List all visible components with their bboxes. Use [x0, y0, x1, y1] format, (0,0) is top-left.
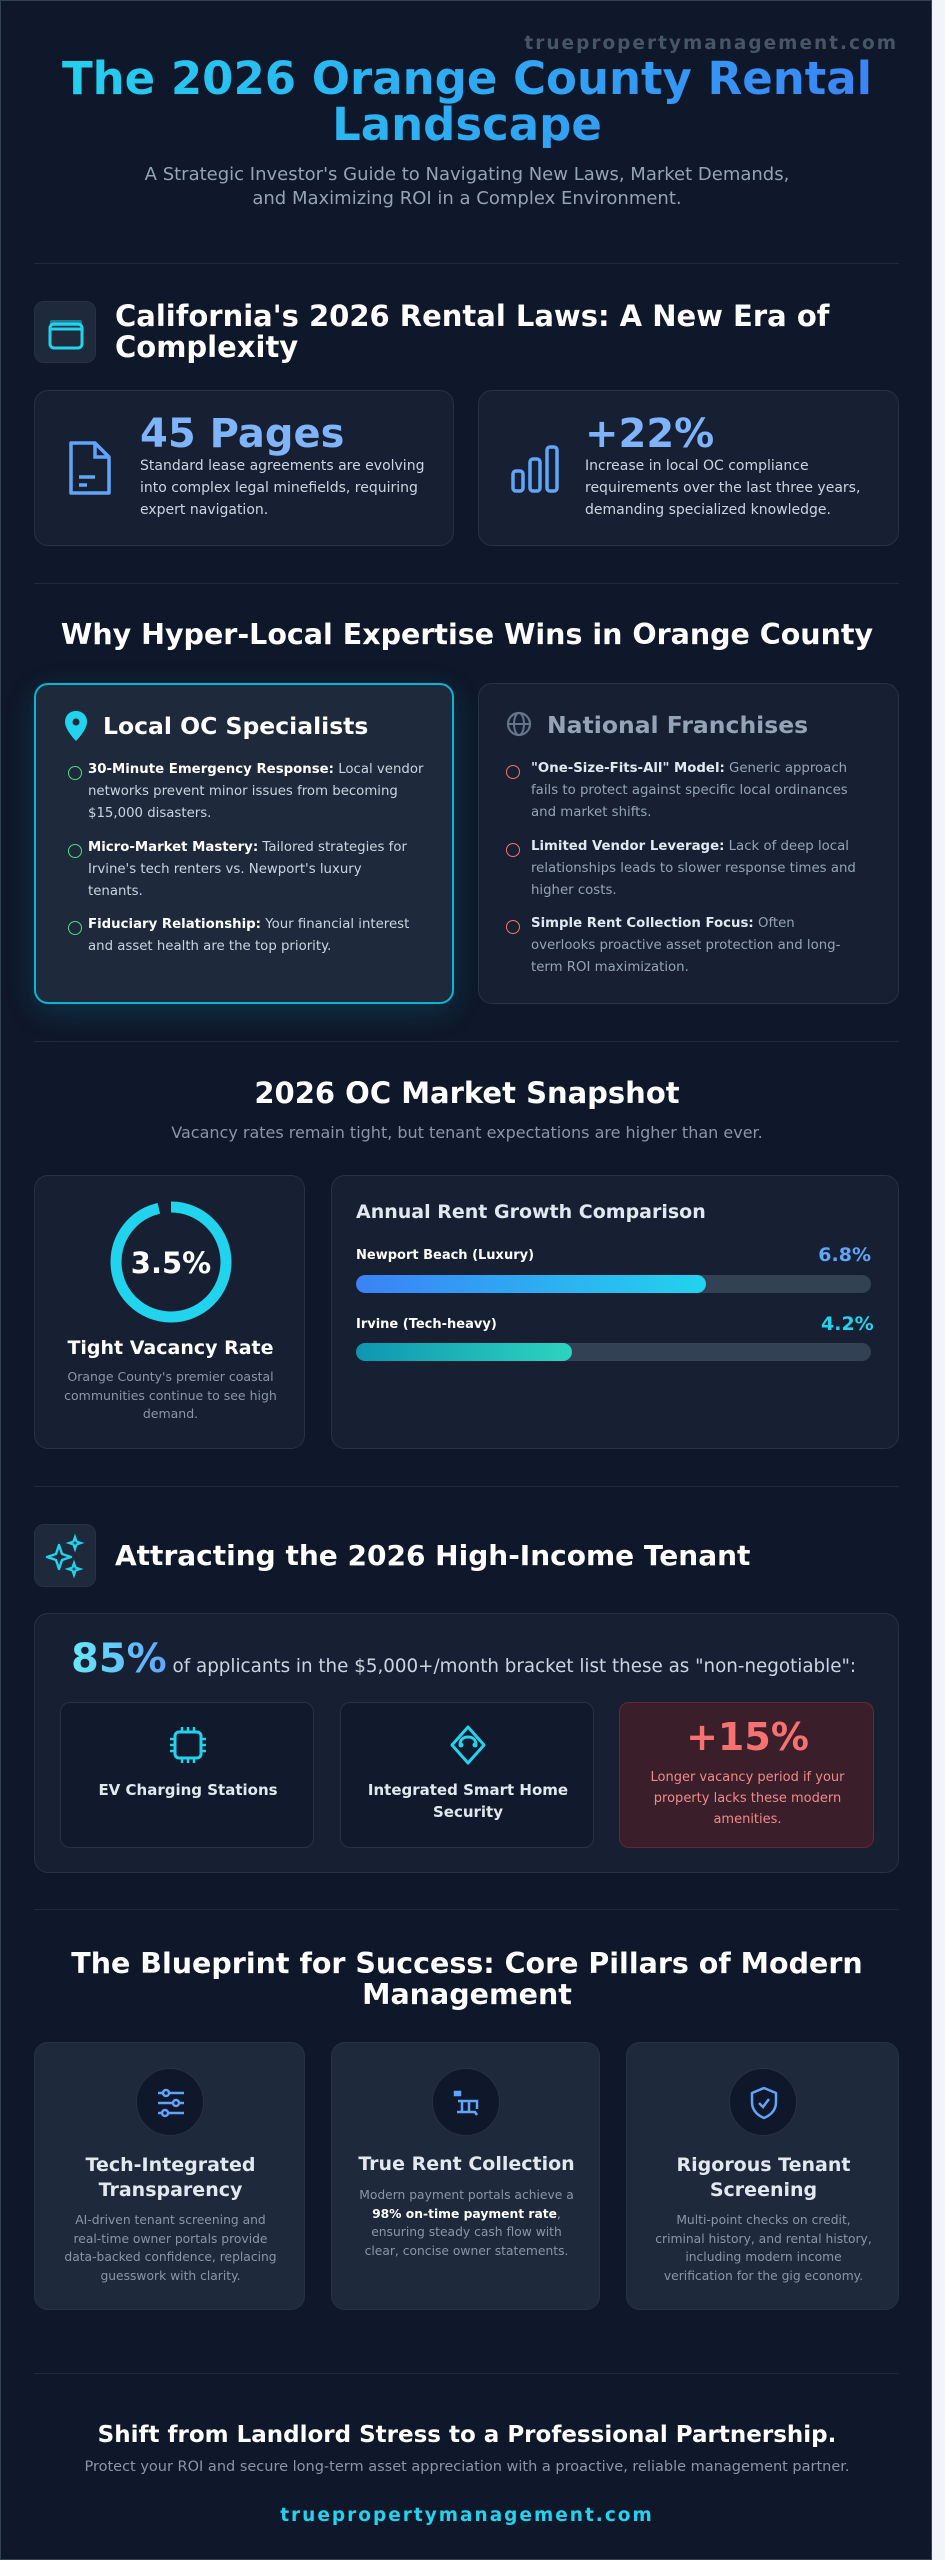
pillar: tech transparency: data-backed confidence, replacing [64, 2250, 277, 2264]
heading: Complexity [115, 330, 298, 364]
section 1 header [34, 299, 830, 364]
card title: National Franchises [547, 711, 808, 739]
icon: sparkles [34, 1524, 96, 1587]
pillar: tech transparency: AI-driven tenant screening and [75, 2213, 266, 2227]
pillar: tenant screening: verification for the gig economy. [664, 2269, 863, 2283]
pillar: tenant screening: including modern income [685, 2250, 842, 2264]
pillar: tech transparency [34, 2042, 305, 2310]
amenity: smart home [340, 1702, 594, 1848]
donut chart: 3.5% [131, 1246, 211, 1280]
panel: vacancy donut [34, 1175, 305, 1449]
donut chart [110, 1202, 232, 1322]
stat: 45 Pages [140, 411, 344, 457]
pillar: tenant screening: Screening [710, 2179, 817, 2201]
text: Vacancy rates remain tight, but tenant expectations are higher than ever. [171, 1123, 763, 1142]
section 4 header [34, 1524, 750, 1587]
pillar: rent collection: ensuring steady cash flow with [371, 2225, 562, 2239]
watermark: truepropertymanagement.com [524, 33, 898, 54]
stat line: 85% of applicants in the $5,000+/month bracket list these as "non-negotiable": [71, 1636, 856, 1682]
panel: national franchises: "One-Size-Fits-All" Model: Generic approach fails to protect against specific local ordinances and market shifts. [531, 761, 848, 820]
text: 4.2% [821, 1313, 874, 1335]
stat card: 45 pages [34, 390, 454, 546]
callout: +15% [619, 1702, 874, 1848]
subtitle [144, 164, 789, 209]
callout: +15%: +15% [686, 1715, 809, 1759]
panel: vacancy donut: Orange County's premier coastal communities continue to see high demand. [64, 1369, 277, 1421]
bar chart: 6.8% [818, 1244, 871, 1266]
footer url: truepropertymanagement.com [280, 2505, 654, 2526]
icon: bar chart [511, 445, 559, 493]
bar chart: Newport Beach (Luxury) [356, 1248, 534, 1263]
title: Landscape [332, 98, 602, 151]
stat card: 45 pages: Standard lease agreements are evolving into complex legal minefields, requiring expert navigation. [140, 458, 424, 518]
icon: document [69, 441, 111, 495]
icon: shield [729, 2068, 797, 2136]
heading: California's 2026 Rental Laws: A New Era of [115, 299, 829, 333]
callout: +15%: Longer vacancy period if your property lacks these modern amenities. [650, 1770, 845, 1827]
pillar: rent collection: True Rent Collection [358, 2153, 575, 2175]
subtitle: A Strategic Investor's Guide to Navigating New Laws, Market Demands, [145, 164, 789, 185]
subtitle: and Maximizing ROI in a Complex Environment. [252, 188, 682, 209]
pillar: tenant screening [626, 2042, 899, 2310]
panel: national franchises: Simple Rent Collection Focus: Often overlooks proactive asset protection and long-term ROI maximization. [531, 916, 840, 975]
pillar: rent collection [331, 2042, 600, 2310]
pillar: tenant screening: criminal history, and rental history, [655, 2232, 872, 2246]
closing text: Protect your ROI and secure long-term asset appreciation with a proactive, reliable management partner. [84, 2459, 850, 2475]
bar chart: Annual Rent Growth Comparison [356, 1201, 706, 1223]
title [31, 56, 903, 148]
pillar: tech transparency: Transparency [99, 2179, 242, 2201]
panel: national franchises: Limited Vendor Leverage: Lack of deep local relationships leads to slower response times and higher costs. [531, 839, 856, 898]
icon: pin [65, 711, 87, 741]
panel: local OC specialists [34, 683, 454, 1004]
heading: market snapshot: 2026 OC Market Snapshot [254, 1076, 680, 1110]
pillar: tech transparency: guesswork with clarity. [100, 2269, 241, 2283]
icon: payment [432, 2068, 500, 2136]
amenity: smart home: Integrated Smart Home Security [368, 1781, 568, 1821]
panel: national franchises [478, 683, 899, 1004]
bar chart [356, 1201, 871, 1266]
icon: globe [506, 712, 532, 736]
heading: blueprint [71, 1947, 863, 2011]
card title: Local OC Specialists [103, 712, 368, 740]
panel: local OC specialists: Micro-Market Mastery: Tailored strategies for Irvine's tech renters vs. Newport's luxury tenants. [88, 840, 407, 899]
text: Irvine (Tech-heavy) [356, 1317, 497, 1332]
pillar: tech transparency: real-time owner portals provide [74, 2232, 268, 2246]
pillar: tenant screening: Rigorous Tenant [677, 2154, 850, 2176]
stat: +22% [585, 411, 714, 457]
heading: blueprint: Management [362, 1978, 572, 2011]
icon: wallet [34, 301, 96, 363]
panel: vacancy donut: Tight Vacancy Rate [67, 1337, 274, 1359]
amenity: EV charging [60, 1702, 314, 1848]
panel: rent growth bars [331, 1175, 899, 1449]
amenity: EV charging: EV Charging Stations [98, 1781, 278, 1799]
stat card: +22% [478, 390, 899, 546]
panel: local OC specialists: Fiduciary Relationship: Your financial interest and asset health are the top priority. [88, 917, 409, 954]
panel: local OC specialists: 30-Minute Emergency Response: Local vendor networks prevent minor issues from becoming $15,000 disasters. [88, 762, 423, 821]
heading [115, 299, 830, 364]
icon: sliders [136, 2068, 204, 2136]
pillar: tech transparency: Tech-Integrated [86, 2154, 255, 2176]
pillar: rent collection: Modern payment portals achieve a [359, 2188, 574, 2202]
closing headline: Shift from Landlord Stress to a Professional Partnership. [98, 2422, 836, 2448]
pillar: tenant screening: Multi-point checks on credit, [676, 2213, 851, 2227]
pillar: rent collection: clear, concise owner statements. [365, 2244, 568, 2258]
heading: Attracting the 2026 High-Income Tenant [115, 1539, 750, 1572]
heading: hyper-local: Why Hyper-Local Expertise Wins in Orange County [61, 618, 873, 651]
stat card: +22%: Increase in local OC compliance requirements over the last three years, demanding specialized knowledge. [585, 458, 860, 518]
pillar: rent collection: 98% on-time payment rate, [372, 2207, 561, 2221]
panel: amenities [34, 1613, 899, 1873]
title: The 2026 Orange County Rental [62, 52, 872, 105]
heading: blueprint: The Blueprint for Success: Core Pillars of Modern [71, 1947, 863, 1980]
